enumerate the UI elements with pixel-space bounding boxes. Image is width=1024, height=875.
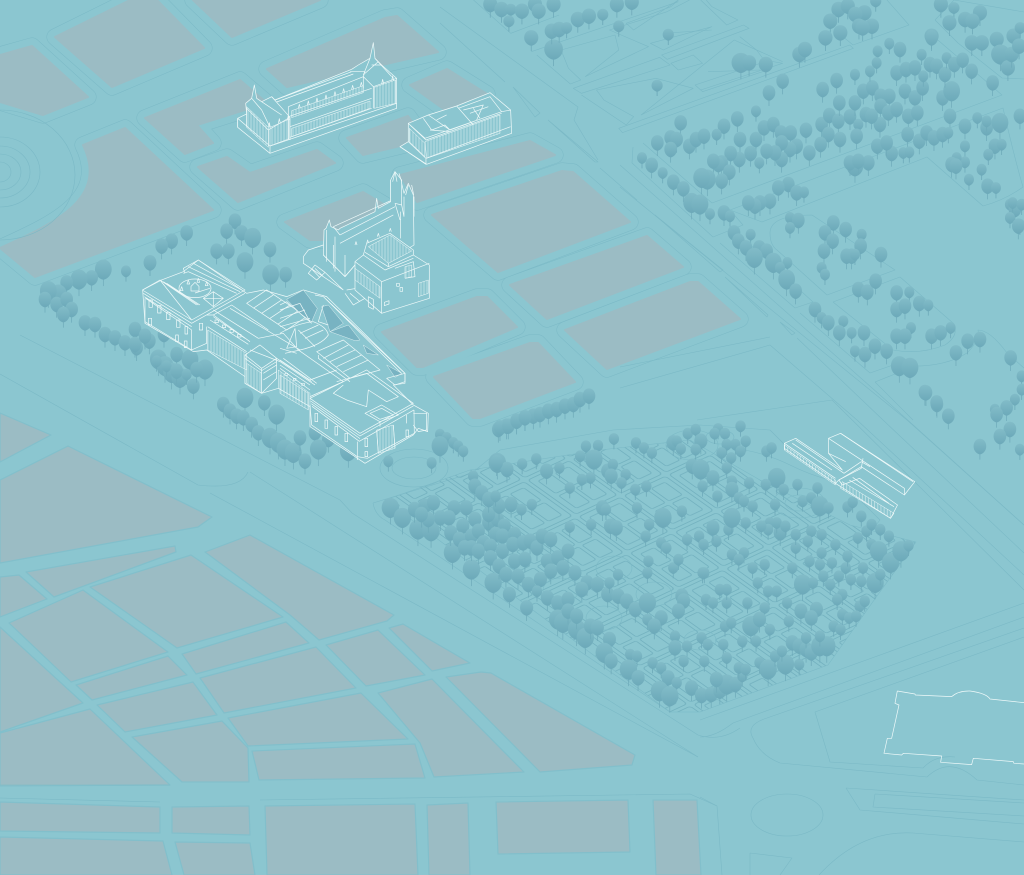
trees: east park (637, 30, 1024, 429)
building outline: palace south-east (884, 691, 1024, 765)
building: palace north (238, 43, 397, 153)
building: museum central roof and portico (213, 290, 343, 407)
building: museum centre and east wing (280, 290, 427, 460)
building: long pavilion (784, 433, 915, 518)
lower city blocks (0, 413, 701, 875)
trees: west cluster and edges (39, 199, 1024, 460)
building: institute north (400, 93, 512, 164)
building: church and auditorium (303, 172, 429, 313)
building: museum (143, 260, 428, 463)
road outlines around upper city blocks (0, 0, 740, 418)
parterre garden paths (392, 430, 916, 712)
building: museum west wing (142, 260, 268, 370)
trees: top row and park north (483, 0, 1024, 96)
trees: around museum (129, 213, 531, 476)
trees: row by avenue (492, 388, 595, 443)
trees: parterre garden (382, 420, 914, 713)
upper city blocks (0, 0, 740, 418)
top garden parterres (474, 0, 853, 133)
